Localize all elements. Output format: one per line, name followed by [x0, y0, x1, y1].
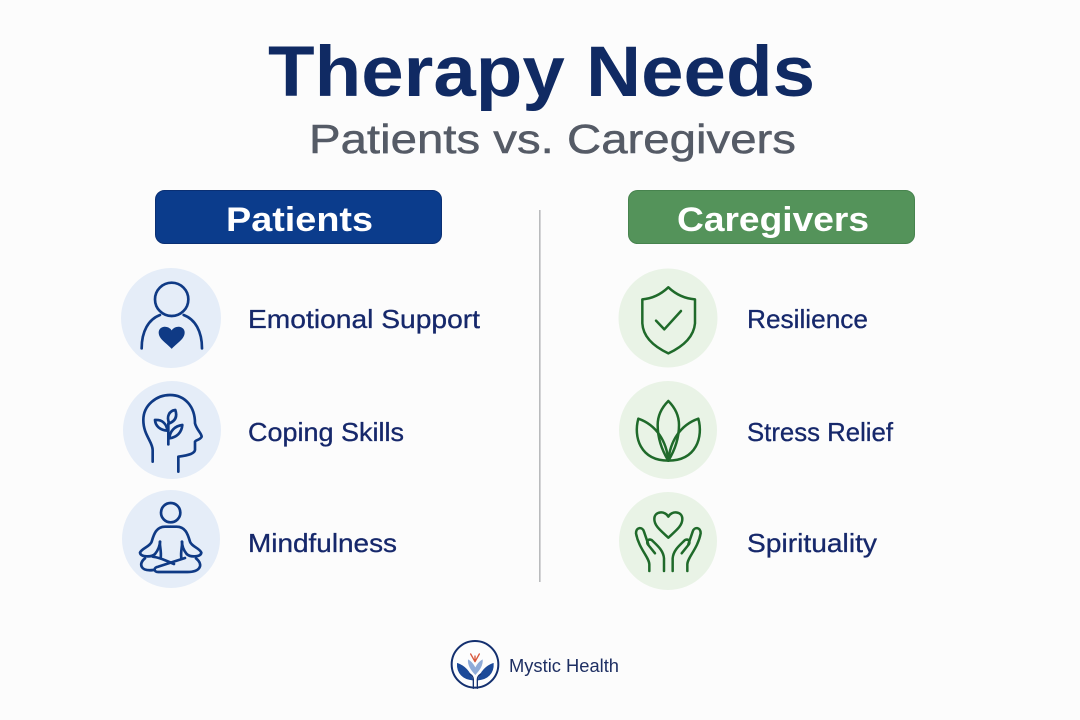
- item: stress relief: [619, 381, 894, 479]
- icon: leaves: [619, 381, 717, 479]
- label: Resilience: [747, 304, 868, 334]
- panel: patients: [121, 190, 481, 588]
- item: resilience: [618, 268, 868, 368]
- label: Mindfulness: [248, 528, 397, 558]
- panel: caregivers: [618, 190, 914, 590]
- label: Emotional Support: [248, 304, 481, 334]
- title: Therapy Needs: [268, 33, 815, 112]
- item: spirituality: [619, 492, 877, 590]
- caregivers header badge: [628, 190, 914, 244]
- icon: meditating figure: [122, 490, 220, 588]
- caregivers header badge: Caregivers: [677, 201, 869, 239]
- icon: lotus logo: [452, 641, 498, 688]
- footer logo: Mystic Health: [452, 641, 619, 688]
- subtitle: Patients vs. Caregivers: [309, 116, 796, 162]
- item: emotional support: [121, 268, 481, 368]
- icon: shield with check: [618, 268, 718, 368]
- icon: hands holding heart: [619, 492, 717, 590]
- center divider: [539, 210, 541, 582]
- item: coping skills: [123, 381, 404, 479]
- icon: head with plant: [123, 381, 221, 479]
- label: Coping Skills: [248, 417, 404, 447]
- label: Stress Relief: [747, 417, 894, 447]
- wordmark: Mystic Health: [509, 656, 619, 676]
- patients header badge: Patients: [226, 201, 373, 239]
- icon: person with heart: [121, 268, 221, 368]
- patients header badge: [156, 190, 442, 244]
- item: mindfulness: [122, 490, 397, 588]
- label: Spirituality: [747, 528, 877, 558]
